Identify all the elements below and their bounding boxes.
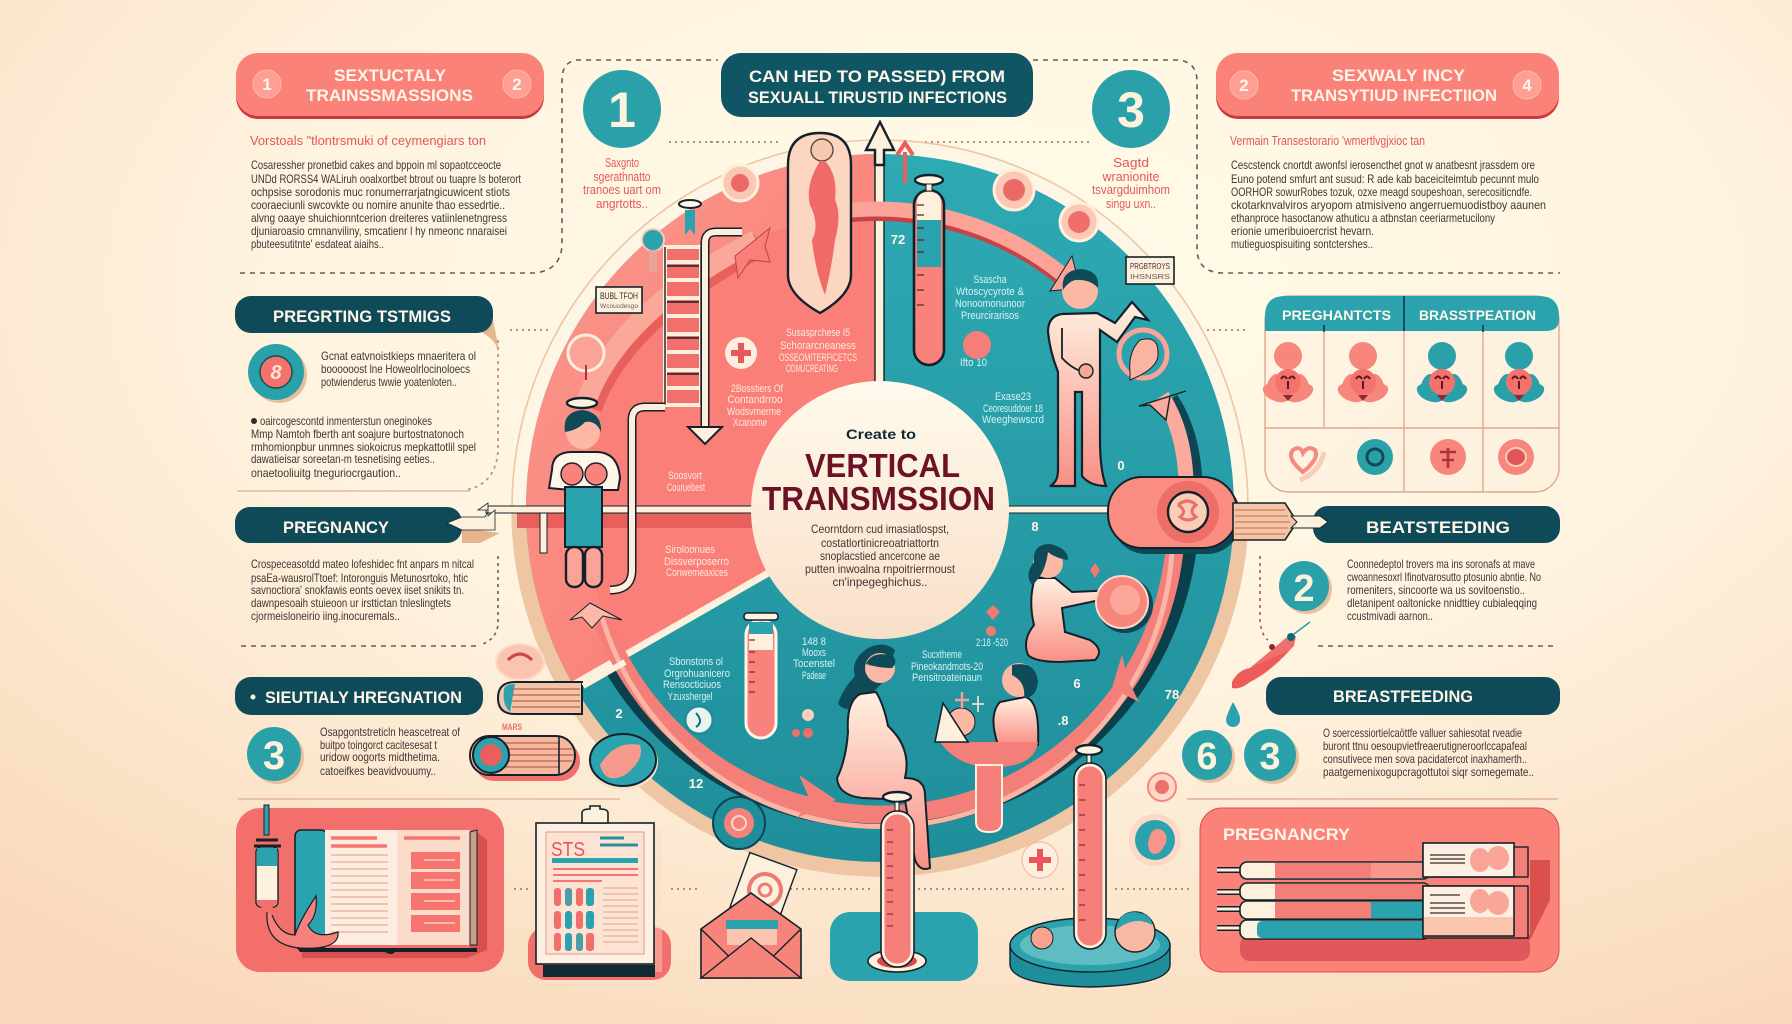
teal sector labels: Rensocticiuos: [663, 679, 721, 691]
small badges on upper ring: [568, 165, 1098, 380]
bassinet and caregiver: [935, 663, 1038, 832]
tube and dish: [1010, 745, 1170, 987]
text block: vertical transmission left: UNDd RORSS4 WALiruh ooalxortbet btrout ou tuapre ls boterort: [251, 172, 522, 186]
text block: pregrting: onaetooliuitg tneguriocrgaution..: [251, 466, 401, 480]
striped pill 1: [498, 662, 625, 714]
numeric markers: 78: [1165, 687, 1179, 702]
tube upper: [914, 175, 944, 365]
teal sector labels: Preurcirarisos: [961, 310, 1019, 322]
icon: teal drop: [1226, 702, 1240, 727]
ladder: [665, 247, 701, 405]
numeric markers: 2: [615, 706, 623, 721]
text block: breastfeeding: consutivece men sova pacidatercot inaxhamerth..: [1323, 752, 1527, 766]
text block: pregnancy: psaEa-wausrolTtoef: Intoronguis Metunosrtoko, htic: [251, 571, 468, 585]
callout 2 text: [1279, 557, 1541, 623]
teal tile with tube: [830, 792, 978, 981]
label box right: [1126, 257, 1174, 284]
callout 1: tranoes uart om: [583, 183, 661, 197]
teal sector labels: Mooxs: [802, 647, 826, 659]
teal sector labels: Orgrohuanicero: [664, 668, 730, 680]
text block: vertical transmission right: ckotarknvalviros aryopom atmisiveno angerruemuodistboy aaunen: [1231, 198, 1546, 212]
header: sexually transmissions left: TRAINSSMASSIONS: [306, 86, 473, 105]
diagonal divider: [573, 572, 770, 685]
text block: vertical transmission right: Cescstenck cnortdt awonfsl ierosencthet gnot w anatbesnt jrassdem ore: [1231, 158, 1535, 172]
central circular diagram: [486, 122, 1248, 876]
callout 2 text: 2: [1293, 568, 1315, 610]
callout 2 text: Coonnedeptol trovers ma ins soronafs at mave: [1347, 557, 1535, 571]
envelope with card: [701, 853, 801, 978]
text block: vertical transmission right: OORHOR sowurRobes tozuk, ozxe meagd soupeshoan, serecositicndfe.: [1231, 185, 1532, 199]
baby icon 1: [1260, 342, 1316, 406]
text block: vertical transmission left: Vorstoals "tlontrsmuki of ceymengiars ton: [250, 134, 486, 148]
teal sector labels: 2:18 -520: [976, 637, 1008, 649]
numeric markers: 6: [1073, 676, 1081, 691]
teal sector labels: Yzuxshergel: [668, 691, 712, 703]
center title: Create to: [846, 426, 916, 442]
tube row 4: [1217, 920, 1430, 939]
striped pill 2: [470, 736, 580, 781]
text block: vertical transmission left: pbuteesutitnte' esdateat aiaihs..: [251, 237, 384, 251]
text block: vertical transmission left: djuniaroasio cmnanviliny, smcatienr l hy nmeonc nnaraisei: [251, 224, 507, 238]
teal sector labels: Sucxtheme: [922, 649, 962, 661]
callout 8: [248, 344, 307, 403]
numeric markers: 12: [689, 776, 703, 791]
callout 3: wranionite: [1101, 170, 1160, 184]
person with halo: [549, 398, 620, 587]
coral badge striped: [1498, 439, 1534, 475]
table: pregnancy and breastfeeding stages: PREGHANTCTS: [1282, 307, 1391, 323]
tab: pregrting tstmigs: [235, 296, 498, 352]
tab: pregrting tstmigs: PREGRTING TSTMIGS: [273, 307, 451, 326]
center body text: [805, 522, 956, 589]
tab: breasteeding with arrow: [1291, 506, 1560, 543]
text block: vertical transmission left: cooraeciunli swcovkte ou nomire anunite thao essedrtie..: [251, 198, 505, 212]
teal badge: [1357, 439, 1393, 475]
panel: pregnancy tubes: PREGNANCRY: [1223, 825, 1351, 844]
text block: pregnancy: [251, 557, 474, 623]
center body text: Ceorntdorn cud imasiatlospst,: [811, 522, 949, 536]
header: sexually transmissions left: SEXTUCTALY: [334, 66, 447, 85]
header: sexually infection right: SEXWALY INCY: [1332, 66, 1466, 85]
teal sector labels: Pensitroateinaun: [912, 672, 982, 684]
text block: breastfeeding: paatgemenixogupcragottutoi siqr somegemate..: [1323, 765, 1534, 779]
blob icon: [496, 644, 544, 680]
center title: TRANSMSSION: [762, 480, 995, 517]
text block: pregrting: [251, 349, 476, 480]
coral sector labels: Conwemeaxices: [666, 567, 728, 579]
text block: vertical transmission right: mutieguospisuiting sontctershes..: [1231, 237, 1373, 251]
teal sector labels: Wtoscycyrote &: [956, 286, 1025, 298]
callout 1: [583, 70, 661, 211]
tab: breastfeeding: [1266, 677, 1560, 715]
text block: vertical transmission left: alvng oaaye shuichionntcerion dreiteres vatiinlenetngress: [251, 211, 507, 225]
kneeling woman: [1026, 544, 1118, 662]
callout 1: angrtotts..: [596, 197, 648, 211]
table: pregnancy and breastfeeding stages: BRASSTPEATION: [1419, 307, 1536, 323]
callout 3: 3: [1117, 82, 1145, 138]
man figure: [1048, 269, 1148, 486]
label box right: PRGBTROYS: [1130, 262, 1170, 271]
teal sector labels: Weeghewscrd: [982, 414, 1044, 426]
clipboard panel: [528, 806, 671, 980]
header: sexually infection right: TRANSYTIUD INFECTIION: [1291, 86, 1497, 105]
callout 3: tsvargduimhom: [1092, 183, 1170, 197]
book panel with syringe: [236, 805, 504, 972]
people icons: [554, 888, 594, 951]
text block: vertical transmission right: ethanproce hasoctanow athuticu a atbnstan ceeriarmetucilony: [1231, 211, 1495, 225]
sparkles: [955, 563, 1100, 712]
callouts 6 and 3: 6: [1196, 736, 1218, 778]
coral sector labels: Dissverposerro: [664, 556, 729, 568]
tube row 1: [1217, 862, 1430, 879]
text block: pregnancy: Crospeceasotdd mateo lofeshidec fnt anpars m nitcal: [251, 557, 474, 571]
callout 1: sgerathnatto: [594, 170, 651, 184]
text block: vertical transmission right: Euno potend smfurt ant susud: R ade kab baceiciteimtub pecunnt mulo: [1231, 172, 1539, 186]
text block: pregrting: boooooost lne Howeolrlocinoloecs: [321, 362, 470, 376]
callout 2 text: cwoannesoxrl Ifinotvarosutto ptosunio abntie. No: [1347, 570, 1541, 584]
pipe lower: [540, 407, 665, 590]
text block: breastfeeding: buront ttnu oesoupvietfreaerutigneroorlccapafeal: [1323, 739, 1527, 753]
text block: pregrting: rmhomionpbur unmnes siokoicrus mepkattotlil spel: [251, 440, 476, 454]
text block: vertical transmission right: erionie umeribuioercrist hevarn.: [1231, 224, 1374, 238]
center circle: [751, 381, 1009, 639]
ring arrow lower: [570, 508, 1176, 827]
tube row 2: [1217, 883, 1430, 900]
pipe arrow down: [688, 232, 742, 444]
text block: vertical transmission left: ochpsise sorodonis muc ronumerrarjatngicuwicent stiots: [251, 185, 510, 199]
callout 3 lower: uridow oogorts midthetima.: [320, 750, 440, 764]
teal sector labels: Ssascha: [974, 274, 1007, 286]
tab: sieutialy hregnation: SIEUTIALY HREGNATION: [265, 688, 462, 707]
baby icon 3: [1414, 342, 1470, 406]
baby icon 2: [1335, 342, 1391, 406]
ring arrow upper right: [790, 209, 1080, 291]
card top: [1423, 843, 1528, 877]
small red arrow: [897, 143, 913, 183]
coral sector labels: Couruebest: [667, 482, 705, 494]
header: sexually infection right: [1216, 53, 1559, 119]
teal badge bottom: [713, 797, 765, 849]
clipboard panel: STS: [551, 839, 585, 861]
coral sector labels: Siroloonues: [665, 544, 715, 556]
callout 3: Sagtd: [1113, 156, 1149, 170]
panel: pregnancy tubes: [1200, 808, 1559, 972]
coral sector labels: Contandrroo: [728, 394, 782, 406]
tab: breastfeeding: BREASTFEEDING: [1333, 687, 1473, 706]
numeric markers: 0: [1117, 458, 1125, 473]
callout 2 text: romeniters, sincoorte wa us sovitoenstio..: [1347, 583, 1525, 597]
coral sector labels: OSSEOMITERFICETCS: [779, 352, 857, 364]
ring arrow right: [1139, 391, 1195, 483]
coral sector labels: Schorarcneaness: [780, 340, 856, 352]
teal sector labels: [663, 274, 1044, 703]
teal sector labels: Ifto 10: [960, 357, 987, 369]
header: passed from infections: [721, 53, 1033, 117]
book: [295, 830, 477, 954]
icon: syringe rocket: [1232, 622, 1310, 688]
center title: VERTICAL: [805, 447, 960, 484]
text block: pregrting: oaircogescontd inmenterstun oneginokes: [260, 414, 432, 428]
text block: pregrting: dawatieisar soreetan-m tesnetising eeties..: [251, 452, 435, 466]
tiny label: MARS: [502, 722, 522, 732]
fetal ring: [1119, 330, 1167, 380]
coral sector labels: Soosvort: [668, 470, 702, 482]
callout 3 lower: 3: [263, 734, 285, 778]
header: sexually infection right: 4: [1522, 76, 1532, 95]
header: passed from infections: SEXUALL TIRUSTID INFECTIONS: [748, 88, 1007, 107]
dark band under ring: [610, 508, 1191, 821]
header: sexually transmissions left: [236, 53, 544, 119]
text block: breastfeeding: O soercessiortielcaöttfe valluer sahiesotat rveadie: [1323, 726, 1522, 740]
callout 1: Saxgnto: [605, 156, 639, 170]
label box right: IHSNSRS: [1130, 274, 1170, 281]
test tube teal section: [744, 613, 778, 738]
coral sector labels: ODMUCREATING: [786, 363, 838, 375]
center body text: snoplacstied ancercone ae: [820, 549, 940, 563]
center body text: costatlortinicreoatriattortn: [821, 536, 939, 550]
center body text: putten inwoalna rnpoitrierrnoust: [805, 562, 956, 576]
numeric markers: 8: [1031, 519, 1039, 534]
callout 8: 8: [270, 362, 282, 384]
central capsule with fetus: [788, 133, 851, 313]
coral sector: [526, 154, 880, 685]
pill capsule: [1108, 477, 1241, 554]
center title: [762, 426, 995, 517]
tube row 3: [1217, 901, 1430, 919]
table: pregnancy and breastfeeding stages: [1260, 296, 1559, 492]
text block: pregrting: Mmp Namtoh fberth ant soajure burtostnatonoch: [251, 427, 464, 441]
callout 3: singu uxn..: [1106, 197, 1156, 211]
coral sector labels: Susasprchese I5: [786, 327, 850, 339]
coral sector labels: Xcanome: [733, 417, 767, 429]
text block: breastfeeding: [1323, 726, 1534, 779]
coral horizontal shadow: [517, 513, 757, 528]
coral sector labels: Wodsvmerme: [727, 406, 781, 418]
callout 3 lower: buitpo toingorct cacitesesat t: [320, 738, 438, 752]
callouts 6 and 3: [1182, 729, 1299, 784]
text block: vertical transmission left: Cosaressher pronetbid cakes and bppoin ml sopaotcceocte: [251, 158, 501, 172]
teal sector labels: Nonoomonunoor: [955, 298, 1025, 310]
baby badge lower left: [588, 734, 658, 790]
text block: vertical transmission right: [1230, 134, 1546, 251]
numeric markers: [615, 232, 1179, 791]
teal sector labels: Padeae: [802, 670, 826, 682]
ring arrow upper left: [586, 228, 770, 408]
horizontal divider: [486, 506, 1110, 513]
tiny badges teal sector: [685, 706, 814, 738]
tab: pregnancy with arrow: [235, 503, 500, 543]
small badges bottom right: [1022, 773, 1181, 878]
label box left: [596, 287, 642, 313]
syringe: [254, 805, 338, 948]
callouts 6 and 3: 3: [1259, 736, 1281, 778]
coral sector labels: 2Bosstiers Of: [731, 383, 784, 395]
text block: pregrting: Gcnat eatvnoistkieps mnaeritera ol: [321, 349, 476, 363]
header: passed from infections: CAN HED TO PASSED) FROM: [749, 67, 1005, 86]
header: sexually transmissions left: 1: [262, 75, 272, 94]
label box left: Wcoucdesgo: [600, 304, 639, 310]
tab: pregnancy with arrow: PREGNANCY: [283, 518, 390, 537]
tab: breasteeding with arrow: BEATSTEEDING: [1366, 518, 1510, 537]
header: sexually transmissions left: 2: [512, 75, 522, 94]
teal sector labels: Tocenstel: [793, 658, 835, 670]
callout 1: 1: [608, 82, 636, 138]
coral sector labels: [664, 327, 857, 579]
numeric markers: .8: [1058, 713, 1068, 728]
baby icon 4: [1491, 342, 1547, 406]
teal sector labels: Sbonstons ol: [669, 656, 723, 668]
heart icon: [1291, 448, 1324, 480]
striped connector right: [1233, 503, 1297, 540]
numeric markers: 72: [891, 232, 905, 247]
teal sector labels: Exase23: [995, 391, 1031, 403]
callout 2 text: ccustmivadi aarnon..: [1347, 609, 1433, 623]
callout 2 text: dletanipent oaltonicke nnidttiey cubialeqqing: [1347, 596, 1537, 610]
tab: sieutialy hregnation: [235, 677, 483, 715]
inner coral sector: [584, 212, 880, 656]
callout 3 lower: [247, 725, 461, 784]
callout 3: [1092, 70, 1170, 211]
text block: pregnancy: dawnpesoaih stuieoon ur irsttictan tnleslingtets: [251, 596, 451, 610]
text block: pregnancy: cjormeisloneirio iing.inocuremals..: [251, 609, 400, 623]
header: sexually infection right: 2: [1239, 76, 1249, 95]
label box left: BUBL TFOH: [600, 291, 638, 301]
teal sector labels: Ceoresuddoer 18: [983, 403, 1043, 415]
text block: pregnancy: savnoctiora' snokfawis eonts oevex iiset snikits tn.: [251, 583, 464, 597]
teal sector labels: 148 8: [802, 636, 826, 648]
center body text: cn'inpegeghichus..: [832, 575, 928, 589]
teal sector labels: Pineokandmots-20: [911, 661, 983, 673]
text block: vertical transmission right: Vermain Transestorario 'wmertlvgjxioc tan: [1230, 134, 1425, 148]
text block: vertical transmission left: [250, 134, 522, 251]
vertical divider arrow: [866, 122, 894, 400]
dotted pink disc: [1096, 576, 1153, 633]
callout 3 lower: Osapgontstreticln heascetreat of: [320, 725, 461, 739]
coral badge: [1430, 439, 1466, 475]
callout 3 lower: catoeifkes beavidvouumy..: [320, 764, 436, 778]
pregnant woman: [837, 644, 930, 869]
card bottom: [1423, 886, 1528, 938]
text block: pregrting: potwienderus twwie yoatenloten..: [321, 375, 457, 389]
